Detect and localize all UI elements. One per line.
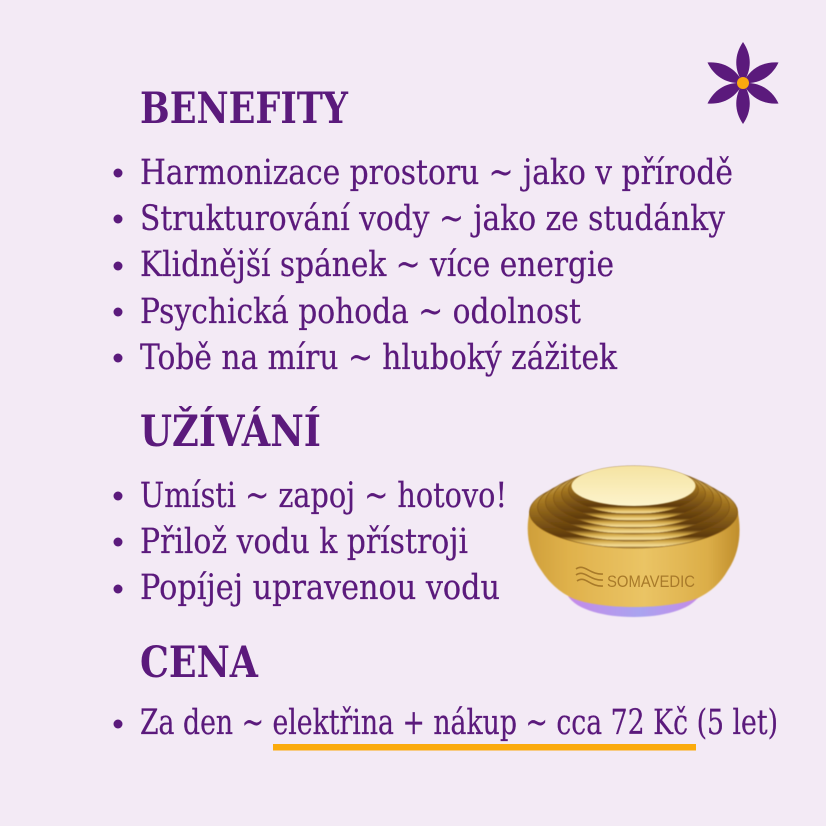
device logo text: SOMAVEDIC [607,572,695,591]
list: usage [114,476,507,608]
heading: UŽÍVÁNÍ: UŽÍVÁNÍ [140,406,321,457]
device rings [530,466,738,548]
icon: purple flower [704,42,782,124]
device: gold Somavedic [528,466,740,617]
list: benefits [114,153,733,378]
list: benefits: Strukturování vody ~ jako ze studánky [140,199,725,239]
device body [528,487,740,607]
heading: BENEFITY: BENEFITY [140,84,349,134]
list: benefits: Psychická pohoda ~ odolnost [140,292,581,332]
list: usage: Přilož vodu k přístroji [140,522,468,562]
heading: CENA: CENA [140,638,259,688]
list: usage: Popíjej upravenou vodu [140,568,500,608]
list: usage: Umísti ~ zapoj ~ hotovo! [140,476,507,516]
device logo waves [576,567,603,586]
list: benefits: Harmonizace prostoru ~ jako v přírodě [140,153,733,193]
list: benefits: Klidnější spánek ~ více energie [140,245,614,285]
device top disc [572,466,696,506]
device LED base [568,596,699,617]
list: benefits: Tobě na míru ~ hluboký zážitek [140,338,618,378]
orange underline [273,744,696,750]
